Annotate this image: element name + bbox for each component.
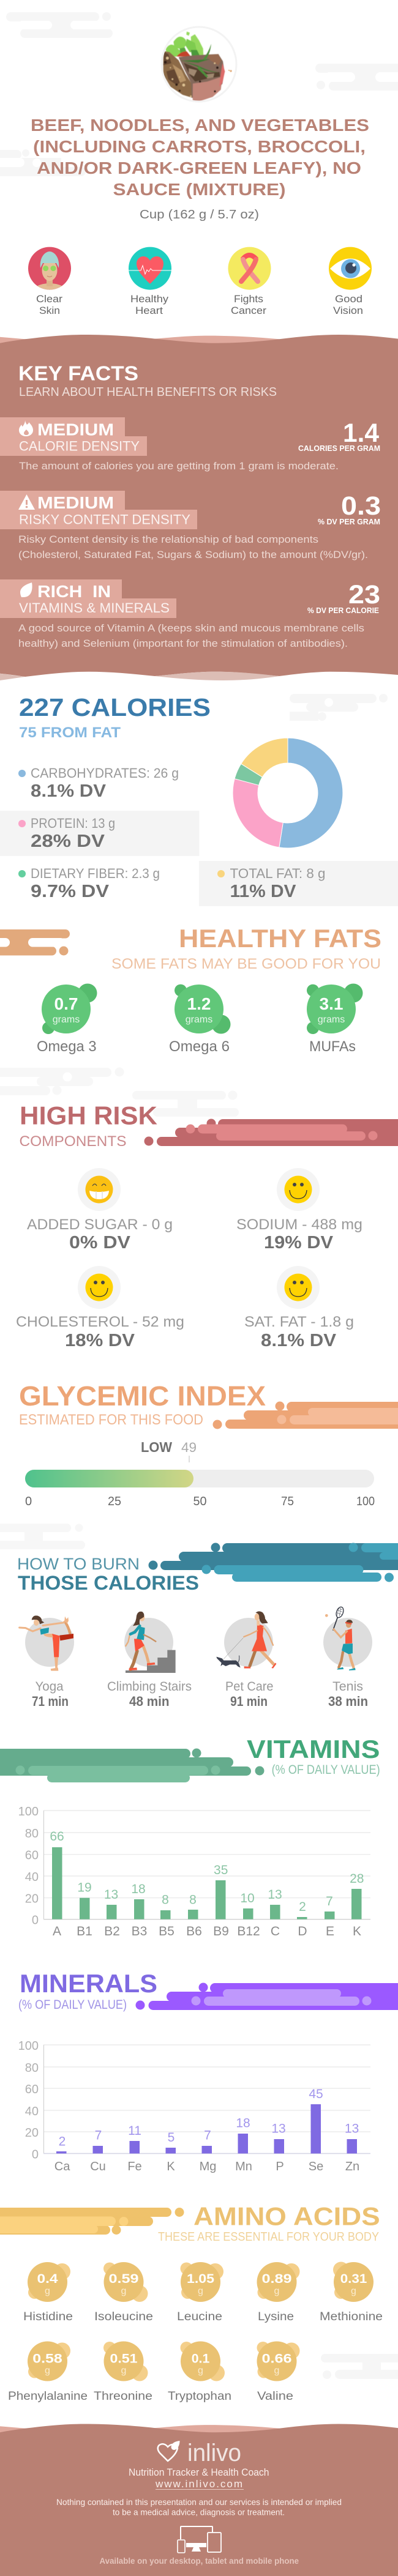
cloud decoration: above high risk [132,1090,239,1117]
fact: calorie density: The amount of calories you are getting from 1 gram is moderate. [19,460,339,472]
amino acids heading: AMINO ACIDS [193,2202,380,2231]
bar chart: minerals: 40 [25,2105,39,2118]
amino acid: isoleucine: Isoleucine [94,2310,153,2323]
amino acid: histidine: 0.4 [37,2272,58,2286]
healthy fat: MUFAs [307,984,362,1055]
benefit: good vision: Good [335,293,362,305]
bar chart: vitamins: B12 [237,1924,260,1938]
minerals decoration [136,1982,398,2010]
bar chart: minerals: 7 [95,2129,102,2143]
amino acid: methionine: g [351,2286,356,2296]
bar chart: minerals: P [276,2160,284,2173]
glycemic index scale bar: 75 [281,1495,294,1508]
legend: total fat: 11% DV [230,882,296,901]
vitamins subheading: (% OF DAILY VALUE) [272,1763,380,1777]
bar chart: vitamins: D [298,1924,307,1938]
activity: yoga [20,1615,74,1709]
bar chart: vitamins: B9 [213,1924,229,1938]
healthy fats decoration [0,929,70,956]
fact: rich in vitamins and minerals [0,579,380,649]
bar chart: vitamins: C [271,1924,280,1938]
bar chart: minerals: 20 [25,2126,39,2140]
amino acid: threonine: g [121,2366,126,2376]
fact: calorie density: MEDIUM [37,420,114,439]
amino acid: phenylalanine [8,2341,88,2403]
bar chart: minerals [18,2039,370,2173]
bar chart: minerals: 45 [309,2087,323,2101]
bar chart: minerals: K [167,2160,175,2173]
amino acid: tryptophan: g [198,2366,203,2376]
bar chart: vitamins: K [353,1924,361,1938]
bar chart: minerals: Mn [235,2160,252,2173]
fact: risky content density: % DV PER GRAM [318,517,380,526]
legend: dietary fiber: 9.7% DV [31,882,110,901]
bar chart: vitamins: B6 [186,1924,202,1938]
bar chart: vitamins: 8 [189,1893,197,1907]
activity: tennis: Tenis [332,1680,363,1694]
amino acid: methionine [320,2261,383,2323]
legend: protein: 28% DV [31,832,105,851]
title: AND/OR DARK-GREEN LEAFY), NO [37,158,361,177]
inlivo wordmark: inlivo [187,2440,241,2466]
disclaimer: Nothing contained in this presentation and our services is intended or implied [56,2497,342,2507]
healthy fat: omega 6 [169,985,230,1055]
healthy fat: omega 3: 0.7 [54,994,78,1013]
healthy fat: omega 6: Omega 6 [169,1038,230,1055]
fact: rich in vitamins and minerals: VITAMINS & MINERALS [19,600,170,616]
amino acid: isoleucine [94,2262,153,2323]
risk: added sugar: 0% DV [69,1233,131,1253]
healthy fat: omega 3: Omega 3 [37,1038,97,1055]
bar chart: vitamins: B3 [132,1924,147,1938]
benefit: fights cancer: Cancer [231,305,266,316]
amino acid: lysine: Lysine [258,2310,294,2323]
bar chart: vitamins: A [53,1924,61,1938]
amino acid: phenylalanine: g [45,2366,50,2376]
healthy fat: MUFAs: grams [318,1014,345,1025]
minerals subheading: (% OF DAILY VALUE) [18,1998,127,2012]
key facts subheading: LEARN ABOUT HEALTH BENEFITS OR RISKS [19,385,277,399]
risk: added sugar: ADDED SUGAR - 0 g [27,1216,173,1233]
title: (INCLUDING CARROTS, BROCCOLI, [33,137,366,156]
icon: warning triangle [18,494,35,510]
benefit: clear skin: Skin [39,305,60,316]
high risk heading: HIGH RISK [20,1101,157,1130]
amino acids decoration [0,2208,184,2235]
risk: saturated fat [244,1266,354,1350]
benefit: fights cancer [228,247,271,316]
glycemic index value: 49 [181,1440,197,1455]
icon: inlivo heart logo [158,2441,180,2461]
benefit: clear skin [28,247,71,316]
fact: calorie density: CALORIE DENSITY [19,438,140,454]
fact: rich in vitamins and minerals: RICH IN [37,582,111,601]
bar chart: vitamins: 60 [25,1849,39,1863]
risk: cholesterol: 18% DV [65,1331,135,1350]
healthy fat: omega 3 [37,984,97,1055]
website link: www.inlivo.com [155,2478,242,2490]
bar chart: vitamins: 10 [240,1891,255,1905]
fact: rich in vitamins and minerals: healthy) and Selenium (important for the stimulation of antibodies). [18,638,348,649]
bar chart: vitamins: 0 [32,1914,39,1927]
risk: sodium [236,1168,362,1253]
amino acid: lysine [257,2262,300,2323]
fact: rich in vitamins and minerals: A good source of Vitamin A (keeps skin and mucous membrane cells [18,622,364,634]
bar chart: minerals: 5 [168,2131,175,2145]
bar chart: minerals: Fe [127,2160,142,2173]
amino acid: threonine: 0.51 [110,2352,138,2366]
bar chart: vitamins: E [326,1924,334,1938]
activity: pet care [216,1611,276,1709]
bar chart: minerals: Ca [54,2160,70,2173]
icon: devices [178,2526,221,2553]
benefit: clear skin: Clear [36,293,62,305]
glycemic index scale bar: 25 [108,1495,121,1508]
fact: calorie density: 1.4 [343,419,379,448]
vitamins decoration [0,1749,265,1782]
amino acid: leucine: 1.05 [187,2272,214,2286]
how to burn heading: HOW TO BURN [17,1555,140,1573]
activity: tennis [323,1606,372,1709]
glycemic index value [141,1439,197,1462]
serving size: Cup (162 g / 5.7 oz) [140,208,259,221]
fact: rich in vitamins and minerals: % DV PER CALORIE [307,606,379,615]
cloud decoration: how to burn [0,1524,85,1549]
title [31,116,369,199]
cloud decoration: behind title [0,149,86,176]
availability note: Available on your desktop, tablet and mobile phone [99,2556,299,2566]
vitamins heading: VITAMINS [247,1735,380,1763]
amino acid: histidine: Histidine [23,2310,73,2323]
how to burn heading: THOSE CALORIES [18,1572,199,1594]
healthy fat: omega 6: 1.2 [187,994,211,1013]
risk: saturated fat: 8.1% DV [261,1331,337,1350]
bar chart: minerals: 13 [345,2122,359,2136]
glycemic index scale bar: 50 [193,1495,207,1508]
bar chart: vitamins [18,1805,370,1938]
amino acid: methionine: Methionine [320,2310,383,2323]
activity: yoga: Yoga [36,1680,64,1694]
bar chart: vitamins: B1 [77,1924,92,1938]
bar chart: vitamins: 18 [131,1882,146,1896]
legend: total fat: TOTAL FAT: 8 g [230,866,326,881]
amino acid: leucine: g [198,2286,203,2296]
benefit: good vision: Vision [333,305,363,316]
healthy fats subheading: SOME FATS MAY BE GOOD FOR YOU [111,956,381,972]
glycemic index subheading: ESTIMATED FOR THIS FOOD [19,1412,203,1428]
fact: rich in vitamins and minerals: 23 [348,580,380,609]
amino acid: valine: 0.66 [262,2352,291,2366]
cloud decoration: top left [6,12,113,38]
healthy fat: MUFAs: 3.1 [320,994,343,1013]
risk: sodium: SODIUM - 488 mg [236,1216,362,1233]
amino acid: tryptophan [168,2341,231,2403]
glycemic index heading: GLYCEMIC INDEX [19,1380,266,1412]
amino acids subheading: THESE ARE ESSENTIAL FOR YOUR BODY [158,2230,379,2244]
legend: protein: PROTEIN: 13 g [31,816,115,831]
healthy fats heading: HEALTHY FATS [179,924,381,953]
bar chart: vitamins: B2 [104,1924,120,1938]
title: SAUCE (MIXTURE) [113,180,285,199]
legend: protein [0,811,200,856]
legend: dietary fiber [18,866,160,901]
donut chart: macronutrients [233,738,343,848]
fact: risky content density: 0.3 [341,491,381,521]
fact: risky content density: MEDIUM [37,493,114,512]
amino acid: tryptophan: Tryptophan [168,2390,231,2403]
bar chart: minerals: 0 [32,2148,39,2161]
amino acid: isoleucine: g [121,2286,126,2296]
disclaimer [56,2497,342,2517]
minerals heading: MINERALS [20,1969,157,1998]
amino acid: lysine: 0.89 [262,2272,291,2286]
amino acid: histidine [23,2262,73,2323]
cloud decoration: left of high risk [0,1067,124,1095]
bar chart: minerals: Mg [200,2160,216,2173]
benefit: good vision [329,247,372,316]
benefit: healthy heart: Heart [135,305,163,316]
bar chart: minerals: 100 [18,2039,39,2053]
glycemic index value: LOW [141,1439,172,1455]
cloud decoration: top right [315,64,398,91]
bar chart: vitamins: 28 [350,1872,364,1886]
glycemic index scale bar: 0 [25,1495,32,1508]
fact: risky content density: (Cholesterol, Saturated Fat, Sugars & Sodium) to the amount (%DV/gr). [18,549,368,560]
bar chart: minerals: 11 [128,2124,141,2138]
bar chart: vitamins: 100 [18,1805,39,1818]
bar chart: vitamins: 80 [25,1827,39,1841]
footer panel [0,2424,398,2576]
bar chart: vitamins: B5 [159,1924,175,1938]
legend: carbohydrates: 8.1% DV [31,781,107,801]
fact: risky content density: RISKY CONTENT DENSITY [19,512,190,527]
bar chart: minerals: Cu [90,2160,106,2173]
icon: flame [19,420,33,436]
activity: pet care: 91 min [230,1694,268,1709]
bar chart: minerals: 80 [25,2061,39,2075]
bar chart: minerals: 13 [271,2122,286,2136]
amino acid: leucine [177,2262,223,2323]
how to burn decoration [148,1543,398,1582]
title: BEEF, NOODLES, AND VEGETABLES [31,116,369,135]
high risk decoration [145,1119,398,1146]
activity: yoga: 71 min [32,1694,69,1709]
bar chart: vitamins: 19 [77,1881,92,1895]
amino acid: methionine: 0.31 [340,2272,367,2286]
amino acid: valine: g [274,2366,279,2376]
risk: added sugar [27,1168,173,1253]
legend: carbohydrates [18,765,179,801]
amino acid: histidine: g [45,2286,50,2296]
healthy fat: omega 6: grams [186,1014,212,1025]
glycemic index scale bar: 100 [356,1495,375,1508]
activity: climbing stairs: Climbing Stairs [107,1680,192,1694]
bar chart: minerals: 60 [25,2083,39,2096]
bar chart: minerals: 7 [204,2129,211,2143]
risk: cholesterol [16,1266,184,1350]
benefit: fights cancer: Fights [234,293,263,305]
bar chart: minerals: 2 [59,2135,66,2149]
bar chart: vitamins: 40 [25,1871,39,1884]
risk: cholesterol: CHOLESTEROL - 52 mg [16,1314,184,1330]
fact: calorie density [0,417,380,472]
key facts heading: KEY FACTS [18,362,138,384]
risk: saturated fat: SAT. FAT - 1.8 g [244,1314,354,1330]
activity: climbing stairs [107,1612,192,1709]
bar chart: vitamins: 8 [162,1893,169,1907]
bar chart: vitamins: 13 [268,1888,282,1902]
panel: key facts [0,335,398,680]
legend: total fat [199,861,398,906]
risk: sodium: 19% DV [264,1233,334,1253]
bar chart: vitamins: 35 [214,1863,228,1877]
benefit: healthy heart: Healthy [130,293,169,305]
bar chart: vitamins: 13 [104,1888,118,1902]
amino acid: phenylalanine: Phenylalanine [8,2390,88,2403]
bar chart: vitamins: 7 [326,1894,333,1908]
bar chart: minerals: Se [309,2160,323,2173]
amino acid: valine [257,2341,300,2403]
legend: dietary fiber: DIETARY FIBER: 2.3 g [31,866,160,881]
benefit: healthy heart [129,247,171,316]
amino acid: isoleucine: 0.59 [109,2272,138,2286]
glycemic index decoration [213,1401,398,1429]
healthy fat: MUFAs: MUFAs [309,1038,356,1055]
how to burn heading [17,1555,199,1594]
amino acid: phenylalanine: 0.58 [32,2352,62,2366]
bar chart: vitamins: 20 [25,1893,39,1906]
cloud decoration: lower right [321,2354,398,2379]
cloud decoration: calories [290,694,388,721]
fact: calorie density: CALORIES PER GRAM [298,444,380,453]
food photo: steak with greens [162,27,236,102]
fact: risky content density [0,491,381,560]
activity: climbing stairs: 48 min [129,1694,169,1709]
amino acid: tryptophan: 0.1 [192,2352,210,2366]
activity: tennis: 38 min [328,1694,368,1709]
amino acid: threonine: Threonine [94,2390,152,2403]
amino acid: threonine [94,2341,152,2403]
bar chart: minerals: Zn [345,2160,359,2173]
calories from fat: 75 FROM FAT [19,724,121,741]
amino acid: leucine: Leucine [177,2310,222,2323]
fact: risky content density: Risky Content density is the relationship of bad components [18,534,318,545]
bar chart: minerals: 18 [236,2116,250,2131]
bar chart: vitamins: 66 [50,1830,64,1844]
amino acid: lysine: g [274,2286,279,2296]
icon: leaf [20,583,32,597]
calories heading: 227 CALORIES [19,693,211,721]
legend: carbohydrates: CARBOHYDRATES: 26 g [31,765,179,781]
tagline: Nutrition Tracker & Health Coach [129,2466,269,2478]
disclaimer: to be a medical advice, diagnosis or treatment. [113,2507,285,2517]
high risk subheading: COMPONENTS [20,1133,126,1150]
bar chart: vitamins: 2 [299,1900,306,1914]
glycemic index scale bar [25,1470,375,1508]
healthy fat: omega 3: grams [53,1014,80,1025]
activity: pet care: Pet Care [225,1680,273,1694]
amino acid: valine: Valine [257,2390,293,2403]
